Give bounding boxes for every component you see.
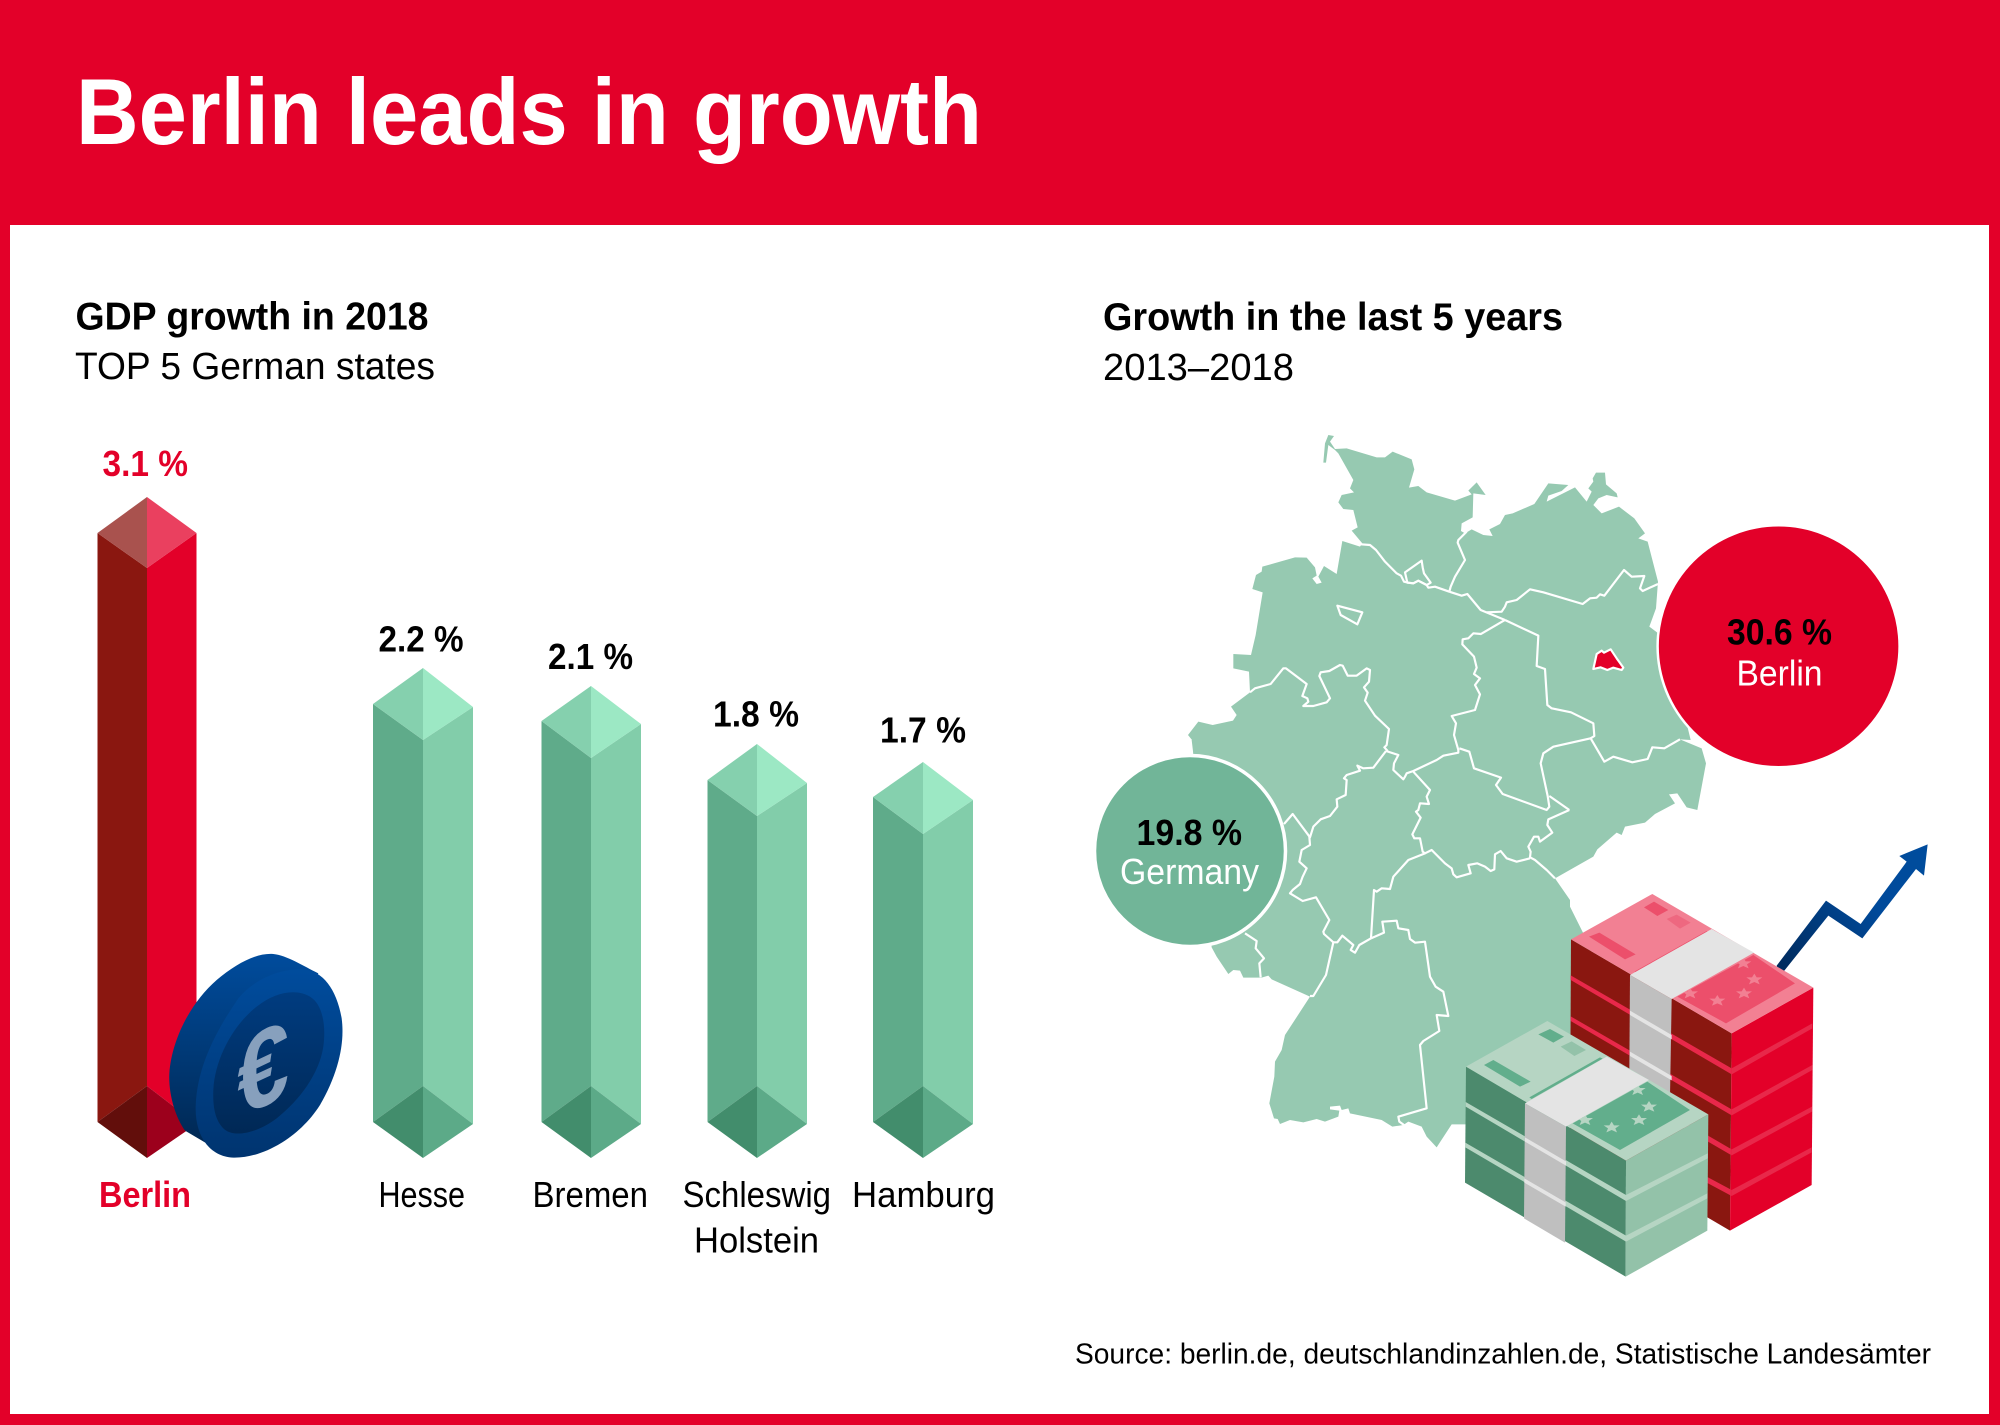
- icon: red money stack: [1570, 894, 1813, 1231]
- bar: Hamburg: [852, 710, 995, 1215]
- bar: Hesse: Hesse: [378, 1174, 465, 1215]
- panel: growth in the last 5 years: [1094, 296, 1928, 1277]
- bar: Berlin: Berlin: [99, 1174, 191, 1215]
- bar: Schleswig Holstein: Schleswig: [682, 1174, 831, 1215]
- title: Berlin leads in growth: [76, 59, 982, 164]
- arrow: rising trend: [1777, 844, 1928, 977]
- callout: Berlin 30.6 %: 30.6 %: [1727, 612, 1832, 652]
- source note: Source: berlin.de, deutschlandinzahlen.de, Statistische Landesämter: [1075, 1338, 1931, 1370]
- bar: Hamburg: 1.7 %: [880, 710, 966, 750]
- icon: green money stack: [1465, 1021, 1708, 1277]
- panel: GDP growth in 2018: [75, 296, 995, 1260]
- callout: Berlin 30.6 %: Berlin: [1736, 652, 1822, 694]
- heading: GDP growth: [75, 296, 435, 388]
- bar: Berlin: 3.1 %: [102, 443, 188, 484]
- bar: Bremen: Bremen: [532, 1174, 648, 1215]
- heading: growth in last 5 years: Growth in the last 5 years: [1103, 296, 1563, 339]
- heading: GDP growth: TOP 5 German states: [75, 346, 435, 388]
- icon: euro coin: €: [237, 995, 289, 1142]
- bar: Schleswig Holstein: 1.8 %: [713, 694, 799, 734]
- bar: Schleswig Holstein: [682, 694, 831, 1260]
- callout: Germany 19.8 %: 19.8 %: [1136, 812, 1242, 853]
- callout: Germany 19.8 %: Germany: [1120, 851, 1259, 892]
- heading: growth in last 5 years: [1103, 296, 1563, 389]
- bar: Hesse: [373, 618, 473, 1215]
- bar: Berlin: [98, 443, 196, 1215]
- heading: growth in last 5 years: 2013–2018: [1103, 347, 1294, 389]
- bar: Bremen: 2.1 %: [548, 636, 633, 677]
- map: Germany: [1188, 435, 1706, 1147]
- callout: Berlin 30.6 %: [1658, 525, 1900, 767]
- callout: Germany 19.8 %: [1094, 756, 1286, 946]
- icon: euro coin: [169, 954, 342, 1158]
- bar: Hesse: 2.2 %: [378, 618, 464, 660]
- bar: Hamburg: Hamburg: [852, 1174, 995, 1215]
- map marker: Berlin state: [1593, 649, 1623, 670]
- heading: GDP growth: GDP growth in 2018: [76, 296, 428, 338]
- bar: Bremen: [532, 636, 648, 1215]
- bar: Schleswig Holstein: Holstein: [694, 1220, 819, 1260]
